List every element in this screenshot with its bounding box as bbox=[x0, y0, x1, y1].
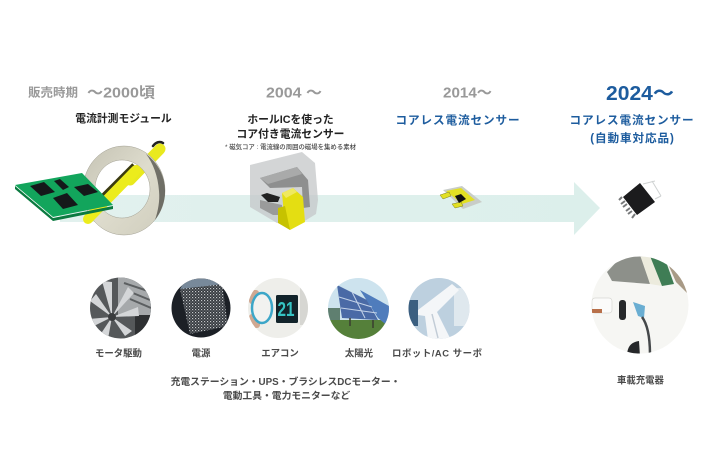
icon: automotive sensor bbox=[619, 181, 661, 218]
icon: coreless sensor bbox=[440, 186, 482, 209]
year: 2000: ～2000頃 bbox=[87, 84, 155, 102]
translucent housing bbox=[250, 152, 318, 223]
heading: coreless automotive: (自動車対応品) bbox=[590, 131, 675, 145]
timeline arrow bbox=[60, 182, 600, 235]
label: onboard charger: 車載充電器 bbox=[617, 374, 665, 386]
heading: cored current sensor: ホールICを使った bbox=[247, 112, 334, 126]
label: robot AC servo: ロボット/AC サーボ bbox=[392, 348, 483, 358]
icon: cored sensor bbox=[250, 152, 318, 230]
thermostat reading: 21 bbox=[278, 299, 294, 321]
yellow conductor bbox=[282, 188, 305, 230]
year: 2024: 2024～ bbox=[606, 83, 674, 105]
rod front bbox=[88, 170, 136, 219]
hall ic bbox=[261, 193, 280, 202]
photo: power supply bbox=[171, 278, 231, 338]
photo: motor bbox=[89, 277, 151, 339]
heading: cored current sensor bbox=[237, 112, 344, 140]
rod back bbox=[130, 149, 160, 180]
icon: module with ring core bbox=[15, 142, 165, 235]
heading: coreless automotive bbox=[570, 113, 694, 145]
label: solar: 太陽光 bbox=[345, 348, 374, 358]
label: other applications bbox=[171, 375, 400, 402]
photo: solar panels bbox=[328, 278, 389, 340]
photo: EV charging bbox=[591, 255, 690, 356]
label: motor drive: モータ駆動 bbox=[95, 348, 142, 358]
magnetic core bbox=[260, 167, 310, 208]
label: other applications: 充電ステーション・UPS・ブラシレスDCモーター・ bbox=[171, 375, 400, 388]
chips bbox=[30, 182, 55, 196]
footnote: magnetic core: * 磁気コア : 電流線の周囲の磁場を集める素材 bbox=[225, 142, 357, 151]
pcb bbox=[15, 186, 113, 221]
photo: robot arm bbox=[408, 278, 470, 340]
label: air conditioner: エアコン bbox=[261, 348, 299, 358]
photo: air conditioner controller bbox=[248, 278, 308, 338]
rod shadow bbox=[100, 165, 134, 199]
heading: coreless automotive: コアレス電流センサー bbox=[570, 113, 694, 127]
heading: current measurement module: 電流計測モジュール bbox=[75, 111, 172, 125]
year: 2014: 2014～ bbox=[443, 84, 492, 102]
ring core bbox=[83, 146, 165, 235]
year: 2004: 2004 ～ bbox=[266, 84, 322, 102]
label: other applications: 電動工具・電力モニターなど bbox=[223, 389, 350, 402]
heading: cored current sensor: コア付き電流センサー bbox=[237, 126, 344, 140]
heading: coreless current sensor: コアレス電流センサー bbox=[396, 113, 520, 127]
period label: 販売時期 bbox=[28, 84, 78, 100]
label: power supply: 電源 bbox=[192, 348, 211, 358]
